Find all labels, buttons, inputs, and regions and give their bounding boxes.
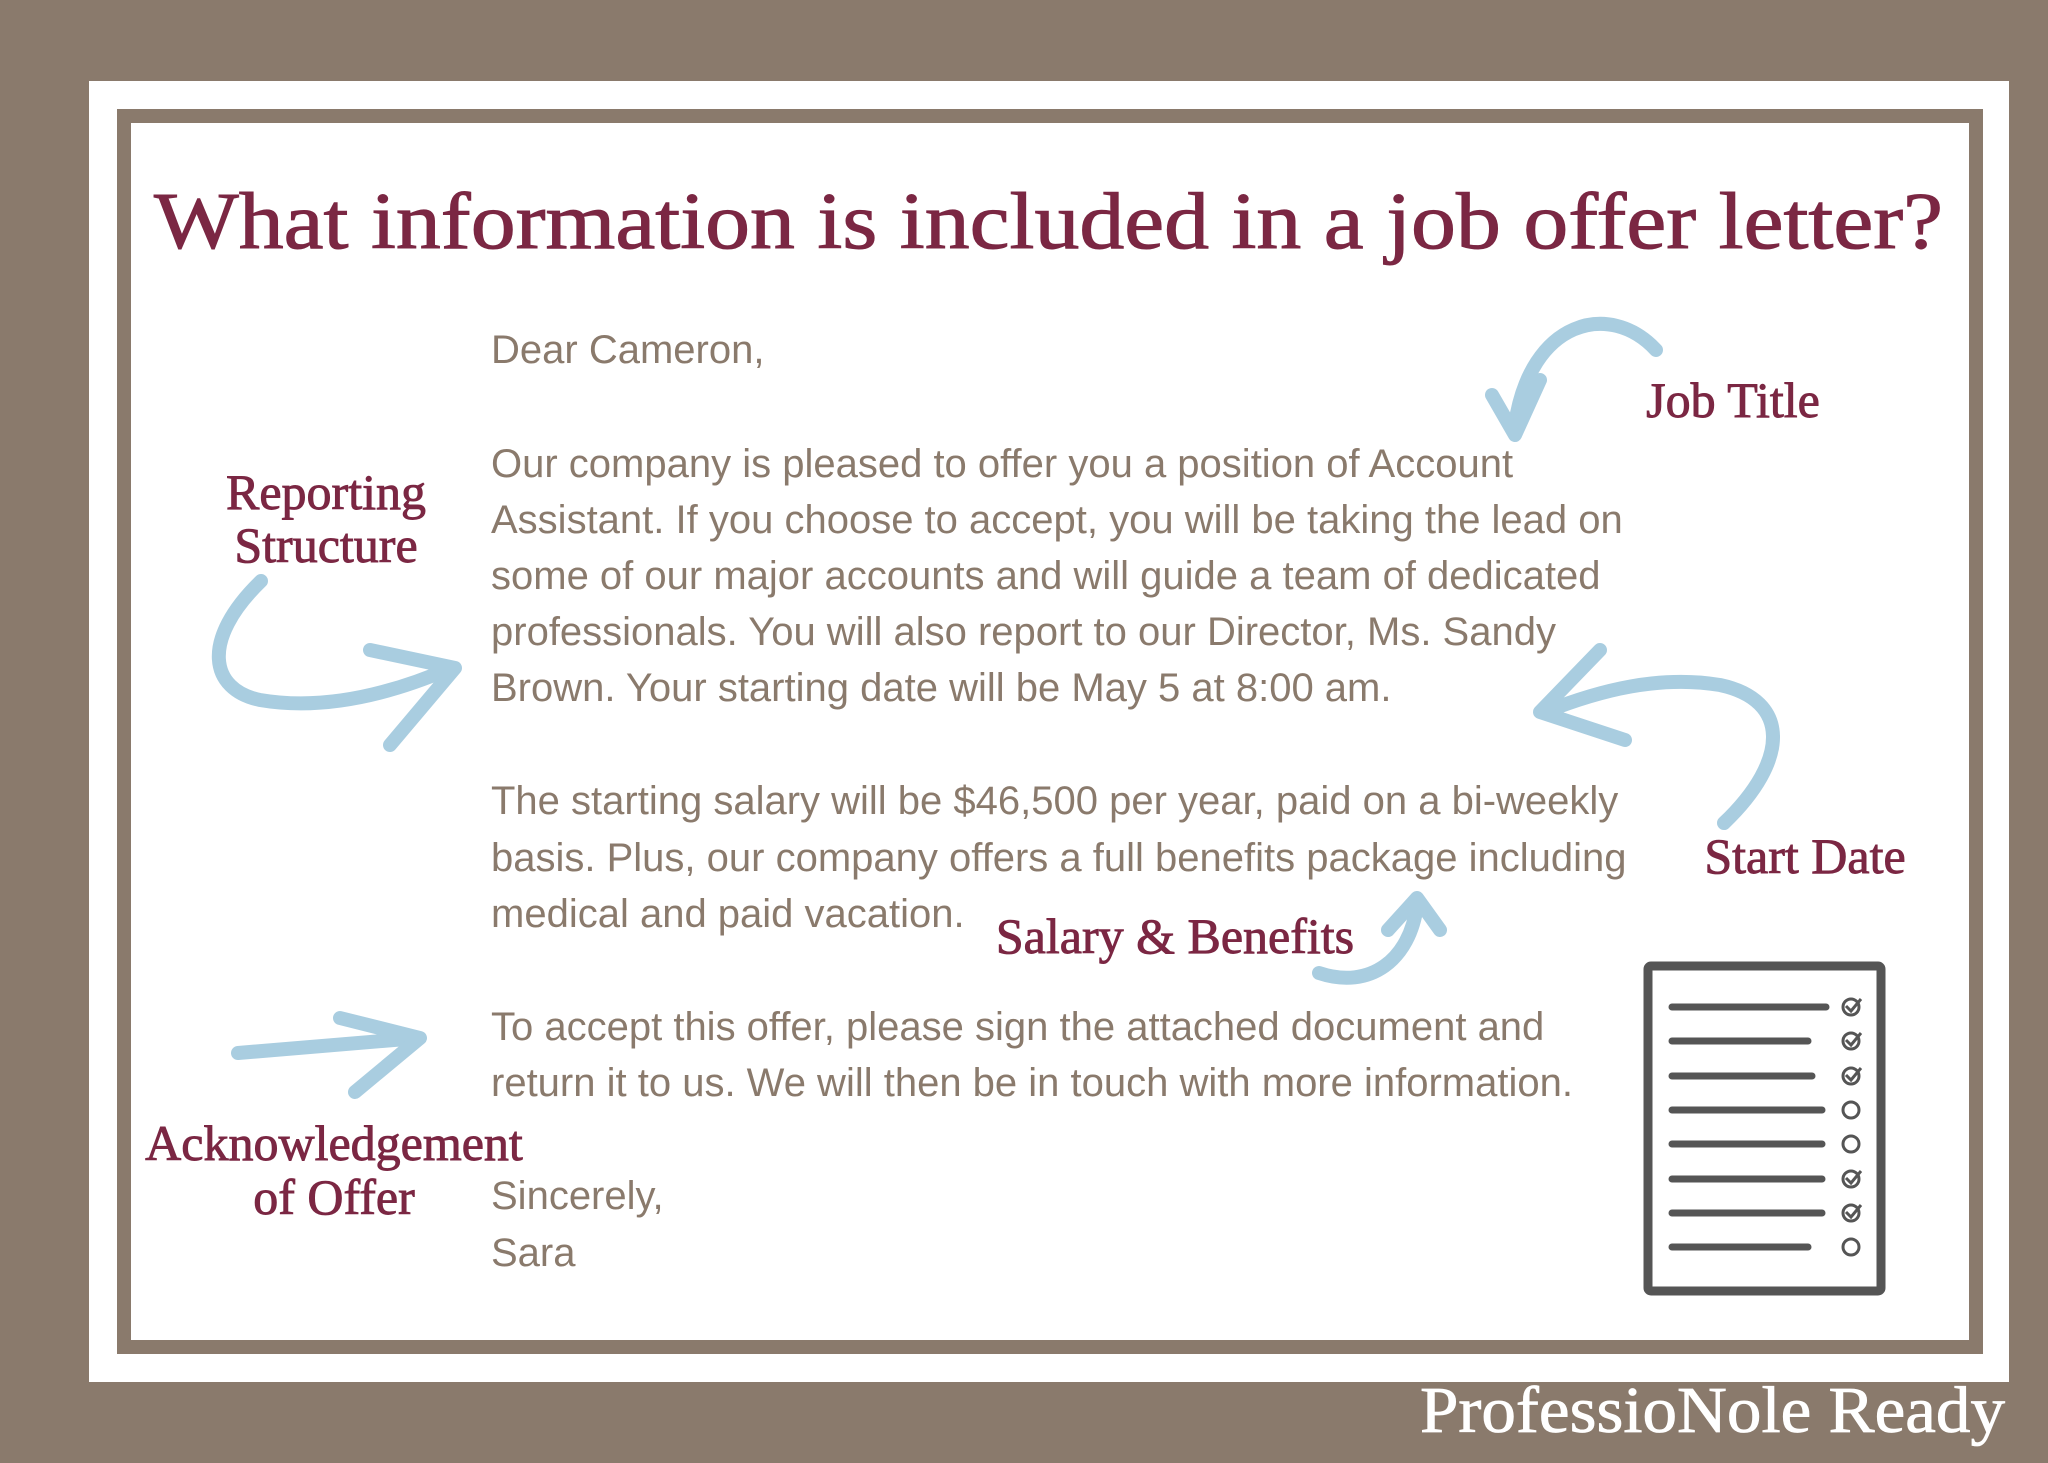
letter body — [491, 328, 1626, 1275]
letter body: Assistant. If you choose to accept, you will be taking the lead on — [491, 498, 1623, 542]
arrow: acknowledgement — [238, 1018, 420, 1092]
letter body: Brown. Your starting date will be May 5 at 8:00 am. — [491, 666, 1392, 710]
letter body: Sara — [491, 1231, 576, 1275]
arrow: job title — [1492, 324, 1656, 435]
icon: checklist — [1648, 966, 1881, 1291]
label: acknowledgement: Acknowledgement — [145, 1115, 523, 1171]
label: start date: Start Date — [1704, 828, 1906, 884]
arrow: salary — [1319, 898, 1440, 978]
label: acknowledgement — [145, 1115, 523, 1225]
letter body: Dear Cameron, — [491, 328, 764, 372]
label: acknowledgement: of Offer — [253, 1169, 415, 1225]
letter body: professionals. You will also report to our Director, Ms. Sandy — [491, 610, 1556, 654]
label: reporting structure — [226, 464, 426, 573]
letter body: The starting salary will be $46,500 per year, paid on a bi-weekly — [491, 779, 1618, 823]
letter body: Sincerely, — [491, 1174, 664, 1218]
label: reporting structure: Reporting — [226, 464, 426, 520]
inner frame — [124, 116, 1976, 1347]
arrows — [219, 324, 1773, 1092]
label: job title: Job Title — [1646, 372, 1820, 428]
label: reporting structure: Structure — [234, 517, 418, 573]
letter body: return it to us. We will then be in touch with more information. — [491, 1061, 1573, 1105]
letter body: basis. Plus, our company offers a full benefits package including — [491, 836, 1626, 880]
arrow: start date — [1540, 650, 1773, 823]
title: What information is included in a job offer letter? — [154, 178, 1943, 266]
letter body: To accept this offer, please sign the attached document and — [491, 1005, 1544, 1049]
letter body: medical and paid vacation. — [491, 892, 965, 936]
label: salary & benefits: Salary & Benefits — [996, 908, 1354, 964]
arrow: reporting — [219, 581, 455, 745]
letter body: Our company is pleased to offer you a position of Account — [491, 442, 1513, 486]
letter body: some of our major accounts and will guide a team of dedicated — [491, 554, 1601, 598]
footer brand: ProfessioNole Ready — [1420, 1374, 2005, 1447]
